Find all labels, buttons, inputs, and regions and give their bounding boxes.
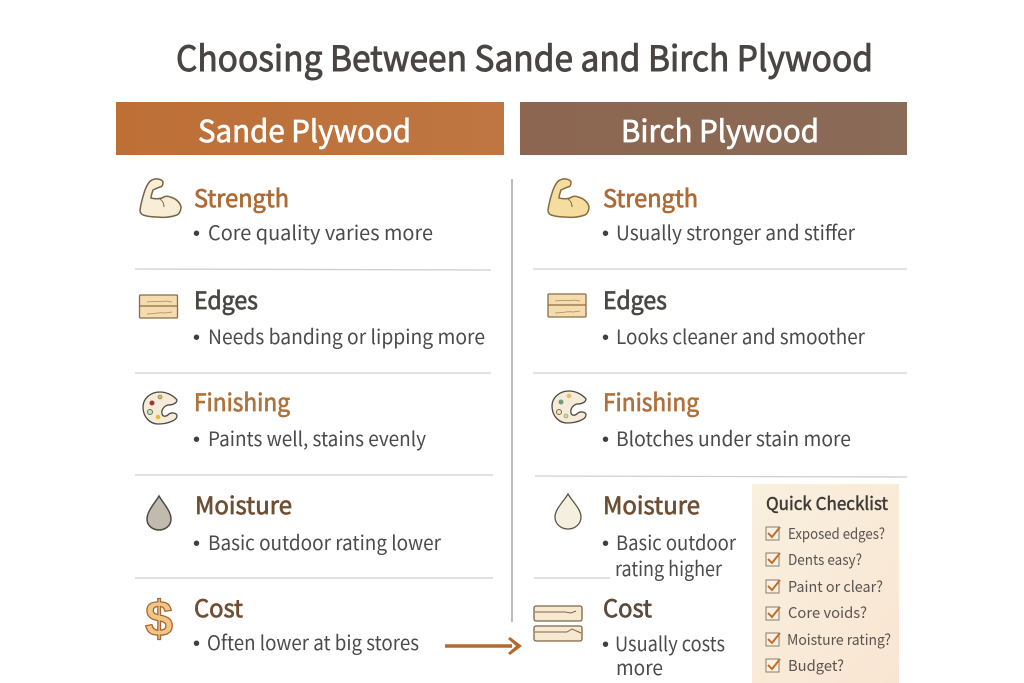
panel: Sande column [140,179,485,656]
checklist item: Core voids: Core voids? [788,602,867,623]
label: Cost: Cost [194,589,243,624]
text: Moisture detail: Basic outdoor rating lower [208,527,441,556]
header: Birch Plywood [520,102,907,155]
text: Edges detail: • [193,327,200,349]
label: Strength: Strength [603,179,698,214]
text: Moisture detail [602,527,736,582]
text: Strength detail: • [193,223,200,245]
label: Edges: Edges [603,281,667,316]
title: Choosing Between Sande and Birch Plywood [176,31,873,82]
text: Moisture detail: rating higher [615,553,722,582]
icon: wood boards (Birch) [548,294,586,317]
icon: paint palette (Sande) [143,392,177,424]
text: Edges detail: Needs banding or lipping more [208,321,485,350]
icon: dollar sign: $ [145,591,173,647]
text: Cost detail: • [602,634,609,656]
icon: water drop (Sande) [147,496,171,530]
text: Finishing detail: • [602,429,609,451]
header: Sande Plywood [116,102,504,155]
checklist item: Budget: Budget? [788,655,844,676]
text: Finishing detail: Blotches under stain more [616,423,851,452]
label: Cost: Cost [603,589,652,624]
header: Birch Plywood: Birch Plywood [621,107,819,151]
text: Moisture detail: • [193,533,200,555]
label: Edges: Edges [194,281,258,316]
checklist item: Moisture rating: Moisture rating? [787,629,891,650]
label: Strength: Strength [194,179,289,214]
text: Finishing detail: Paints well, stains evenly [208,423,427,452]
text: Strength detail: • [602,223,609,245]
text: Edges detail: • [602,327,609,349]
text: Cost detail: Usually costs [615,628,725,657]
panel: Birch column [534,179,865,681]
label: Moisture: Moisture [195,486,292,521]
text: Cost detail: • [193,633,200,655]
label: Moisture: Moisture [603,486,700,521]
panel: quick checklist [752,484,899,683]
label: Finishing: Finishing [194,383,290,418]
checklist item: Dents easy: Dents easy? [788,549,862,570]
text: Cost detail [602,628,725,681]
text: Moisture detail: • [602,533,609,555]
checklist item: Paint or clear: Paint or clear? [788,576,883,597]
checklist heading: Quick Checklist [766,490,888,516]
icon: flexed arm (Birch) [548,179,589,217]
icon: stacked planks [534,606,582,641]
icon: paint palette (Birch) [552,391,586,423]
text: Cost detail: more [616,652,663,681]
checklist item: Exposed edges: Exposed edges? [788,523,885,544]
icon: wood boards (Sande) [140,295,178,318]
arrow [445,637,522,655]
text: Edges detail: Looks cleaner and smoother [616,321,865,350]
text: Finishing detail: • [193,429,200,451]
text: Strength detail: Core quality varies more [208,217,433,246]
icon: flexed arm (Sande) [140,179,181,217]
header: Sande Plywood: Sande Plywood [198,107,411,151]
text: Strength detail: Usually stronger and stiffer [616,217,855,246]
label: Finishing: Finishing [603,383,699,418]
icon: water drop (Birch) [555,494,581,529]
text: Moisture detail: Basic outdoor [616,527,736,556]
text: Cost detail: Often lower at big stores [207,627,419,656]
